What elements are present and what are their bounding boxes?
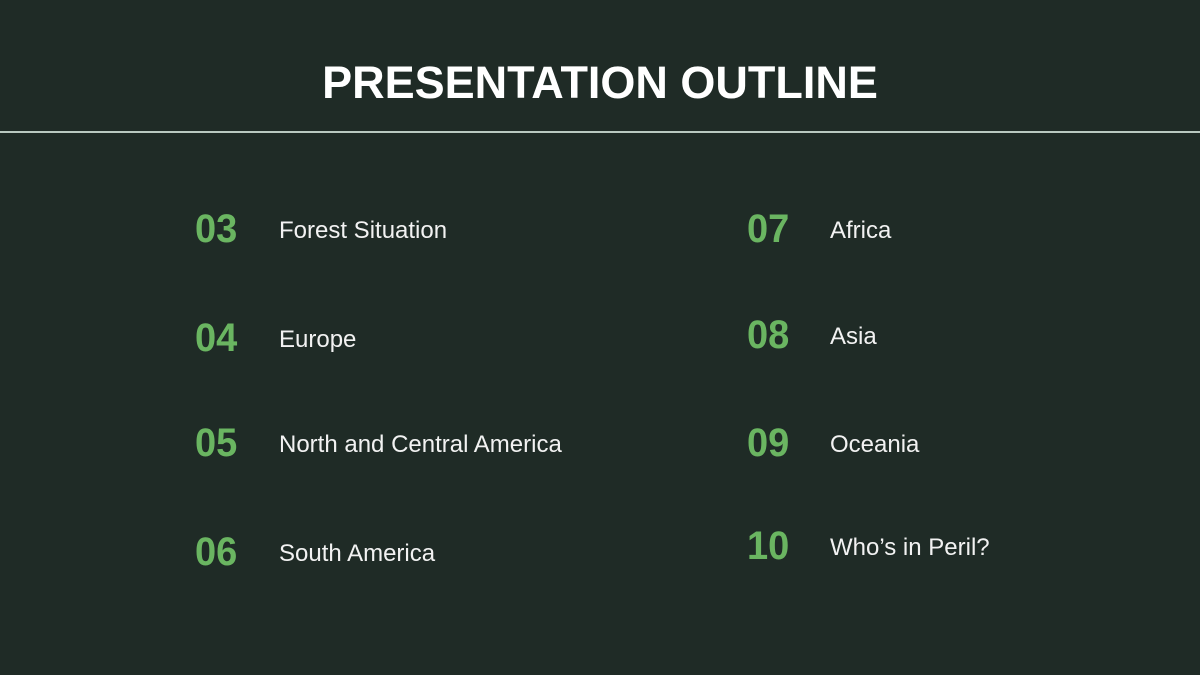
item 04 <box>195 316 356 360</box>
item 06: South America <box>279 540 435 567</box>
title: PRESENTATION OUTLINE <box>322 57 878 108</box>
item 08: 08 <box>747 313 789 357</box>
item 06 <box>195 530 436 574</box>
item 08: Asia <box>830 323 877 350</box>
item 04: Europe <box>279 326 356 353</box>
item 07: Africa <box>830 217 891 244</box>
item 09 <box>747 421 920 465</box>
item 10 <box>747 524 990 568</box>
item 09: Oceania <box>830 431 919 458</box>
item 03: 03 <box>195 207 237 251</box>
item 05 <box>195 421 562 465</box>
item 07 <box>747 207 892 251</box>
item 10: 10 <box>747 524 789 568</box>
item 03 <box>195 207 447 251</box>
item 03: Forest Situation <box>279 217 447 244</box>
item 08 <box>747 313 877 357</box>
item 05: 05 <box>195 421 237 465</box>
item 09: 09 <box>747 421 789 465</box>
item 07: 07 <box>747 207 789 251</box>
item 05: North and Central America <box>279 431 562 458</box>
item 04: 04 <box>195 316 237 360</box>
item 06: 06 <box>195 530 237 574</box>
item 10: Who’s in Peril? <box>830 534 990 561</box>
